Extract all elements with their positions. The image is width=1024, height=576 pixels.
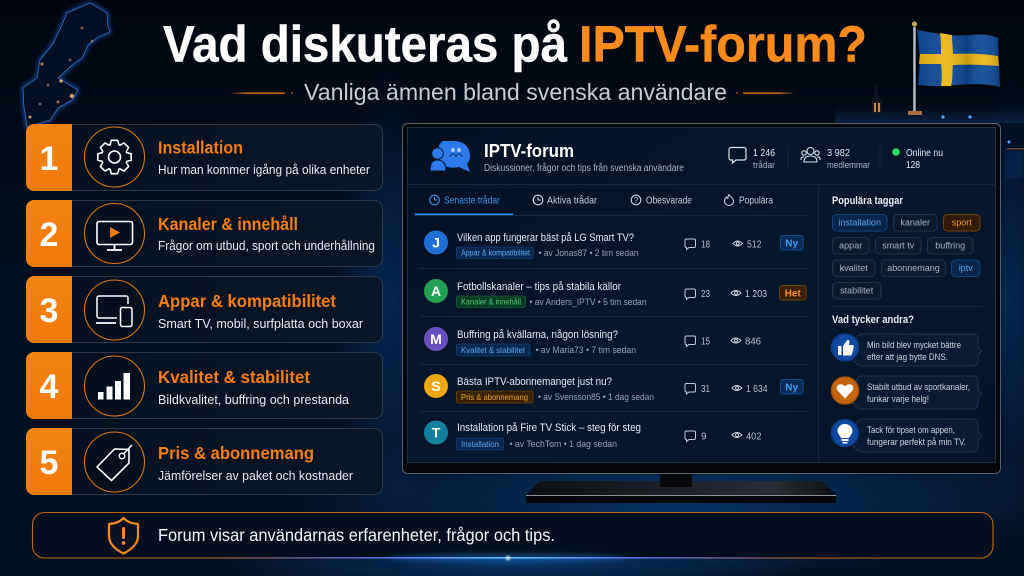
- sidebar: opinions: [832, 314, 982, 452]
- tag chips: iptv: [959, 263, 973, 273]
- title: [163, 16, 867, 72]
- comment 3: [832, 419, 982, 452]
- tab: popular: Populära: [739, 196, 773, 206]
- comment 1: [832, 334, 982, 366]
- description: Hur man kommer igång på olika enheter: [158, 163, 370, 177]
- tab: unanswered: Obesvarade: [646, 196, 692, 206]
- title: IPTV-forum?: [579, 16, 867, 72]
- stat: threads: [729, 147, 775, 171]
- comment 1: efter att jag bytte DNS.: [867, 352, 948, 362]
- tag chips: buffring: [935, 240, 965, 250]
- heading: Installation: [158, 138, 243, 158]
- avatar M: [424, 327, 448, 351]
- tag: Kvalitet & stabilitet: [461, 345, 526, 355]
- description: Jämförelser av paket och kostnader: [158, 469, 353, 483]
- icon: warning shield: [109, 518, 138, 554]
- replies: [685, 384, 710, 395]
- forum panel: [408, 141, 995, 462]
- forum subtitle: Diskussioner, frågor och tips från svenska användare: [484, 162, 684, 174]
- map of Sweden with city lights: [23, 3, 110, 127]
- stat: members: medlemmar: [827, 160, 870, 171]
- number 3: 3: [40, 292, 58, 330]
- skyline: [835, 82, 1024, 178]
- card 4: Kvalitet: [26, 352, 382, 419]
- tab: popular: [724, 194, 773, 206]
- views: [731, 289, 767, 300]
- stat: online: [892, 148, 943, 171]
- icon: devices: [84, 280, 144, 340]
- views: [732, 384, 768, 395]
- replies: 9: [701, 432, 707, 442]
- avatar J: J: [432, 234, 440, 250]
- comment 1: Min bild blev mycket bättre: [867, 340, 961, 350]
- stat: online: 128: [906, 160, 920, 171]
- opinions heading: Vad tycker andra?: [832, 314, 914, 326]
- stat: members: [801, 147, 870, 171]
- callout bar: [32, 512, 993, 563]
- TV frame: [402, 124, 1000, 474]
- tag chips: kanaler: [900, 218, 930, 228]
- avatar M: M: [430, 331, 442, 347]
- sidebar heading: Populära taggar: [832, 195, 904, 207]
- card 3: Appar: [26, 276, 382, 343]
- tag chips: abonnemang: [887, 263, 940, 273]
- description: Smart TV, mobil, surfplatta och boxar: [158, 317, 363, 331]
- tag chips: kvalitet: [840, 263, 868, 273]
- views: [731, 336, 761, 348]
- tab: latest threads: [415, 194, 513, 215]
- icon: gear: [84, 127, 144, 187]
- flag of Sweden: [908, 21, 1000, 115]
- description: Bildkvalitet, buffring och prestanda: [158, 393, 349, 407]
- tag chips: smart tv: [882, 240, 915, 250]
- card 5: Pris: [26, 428, 382, 495]
- comment 2: [832, 376, 982, 409]
- subtitle: Vanliga ämnen bland svenska användare: [304, 79, 727, 105]
- thread title: Installation på Fire TV Stick – steg för steg: [457, 422, 641, 434]
- number 5: [26, 428, 72, 495]
- heading: Pris & abonnemang: [158, 443, 314, 463]
- thread title: Fotbollskanaler – tips på stabila källor: [457, 281, 621, 293]
- thread 2: [424, 279, 806, 308]
- stat: threads: trådar: [753, 160, 775, 171]
- heading: Kanaler & innehåll: [158, 214, 298, 234]
- tab: active threads: Aktiva trådar: [547, 194, 598, 206]
- badge Het: Het: [785, 288, 801, 300]
- views: 402: [746, 432, 762, 442]
- tag chips: installation: [838, 218, 881, 228]
- number 5: 5: [40, 444, 58, 482]
- avatar S: [424, 374, 448, 398]
- stat: online: Online nu: [906, 148, 943, 159]
- badge Ny: Ny: [785, 238, 799, 250]
- avatar T: T: [432, 424, 441, 440]
- tab: latest threads: Senaste trådar: [444, 194, 501, 206]
- views: [733, 240, 762, 250]
- meta: • av Jonas87 • 2 tim sedan: [538, 248, 638, 258]
- meta: • av TechTom • 1 dag sedan: [510, 439, 617, 449]
- thread 3: [424, 327, 761, 356]
- heading: Kvalitet & stabilitet: [158, 367, 310, 387]
- avatar S: S: [431, 378, 441, 394]
- number 2: 2: [40, 216, 58, 254]
- tabs: [415, 194, 773, 215]
- tag chips: [832, 214, 980, 299]
- avatar T: [424, 420, 448, 444]
- comment 3: Tack för tipset om appen,: [867, 425, 955, 435]
- icon: price tag: [84, 432, 144, 492]
- views: [732, 432, 762, 442]
- title: Vad diskuteras på: [163, 16, 568, 72]
- callout text: Forum visar användarnas erfarenheter, frågor och tips.: [158, 525, 555, 545]
- views: 846: [745, 336, 761, 348]
- avatar A: [424, 279, 448, 303]
- tag chips: sport: [952, 218, 972, 228]
- card 2: Kanaler: [26, 200, 382, 267]
- number 1: 1: [40, 140, 58, 178]
- replies: [685, 239, 710, 250]
- thread title: Vilken app fungerar bäst på LG Smart TV?: [457, 232, 634, 244]
- tag chips: stabilitet: [840, 286, 874, 296]
- number 4: [26, 352, 72, 419]
- badge Ny: Ny: [785, 382, 799, 394]
- meta: • av Anders_IPTV • 5 tim sedan: [530, 297, 646, 307]
- tag: Appar & kompatibilitet: [461, 248, 531, 258]
- thread title: Buffring på kvällarna, någon lösning?: [457, 329, 618, 341]
- replies: [685, 336, 710, 348]
- thread 4: [424, 374, 803, 403]
- tag: Pris & abonnemang: [461, 392, 528, 402]
- views: 512: [747, 240, 762, 250]
- comment 3: fungerar perfekt på min TV.: [867, 437, 966, 447]
- badge Ny: [780, 380, 803, 394]
- avatar A: A: [431, 283, 441, 299]
- meta: • av Svensson85 • 1 dag sedan: [538, 392, 654, 402]
- forum title: IPTV-forum: [484, 141, 574, 161]
- icon: forum users: [430, 141, 470, 172]
- replies: [685, 289, 710, 300]
- sidebar: popular tags: [832, 195, 980, 299]
- number 2: [26, 200, 72, 267]
- heading: Appar & kompatibilitet: [158, 291, 336, 311]
- replies: 18: [701, 240, 710, 250]
- badge Het: [780, 286, 806, 300]
- replies: 31: [701, 384, 710, 395]
- tag: Kanaler & innehåll: [461, 296, 521, 306]
- avatar J: [424, 230, 448, 254]
- views: 1 203: [745, 289, 767, 300]
- tab: unanswered: ?: [634, 196, 639, 205]
- comment 2: funkar varje helg!: [867, 394, 929, 404]
- replies: [685, 431, 707, 442]
- replies: 15: [701, 336, 710, 348]
- stat: threads: 1 246: [753, 147, 775, 159]
- views: 1 634: [746, 384, 768, 395]
- comment 2: Stabilt utbud av sportkanaler,: [867, 382, 970, 392]
- icon: TV play: [84, 204, 144, 264]
- badge Ny: [780, 236, 803, 250]
- thread title: Bästa IPTV-abonnemanget just nu?: [457, 376, 612, 388]
- number 3: [26, 276, 72, 343]
- thread 5: [424, 420, 762, 450]
- card 1: Installation: [26, 124, 382, 191]
- number 1: [26, 124, 72, 191]
- meta: • av Maria73 • 7 tim sedan: [536, 345, 636, 355]
- glow line: [200, 553, 816, 563]
- stat: members: 3 982: [827, 147, 850, 159]
- description: Frågor om utbud, sport och underhållning: [158, 239, 375, 253]
- tab: active threads: [533, 194, 598, 206]
- number 4: 4: [40, 368, 59, 406]
- icon: signal bars: [84, 356, 144, 416]
- TV stand: [526, 474, 836, 503]
- tag: Installation: [461, 439, 499, 449]
- tab: unanswered: [631, 195, 692, 206]
- thread 1: [424, 230, 803, 258]
- replies: 23: [701, 289, 710, 300]
- tag chips: appar: [839, 240, 862, 250]
